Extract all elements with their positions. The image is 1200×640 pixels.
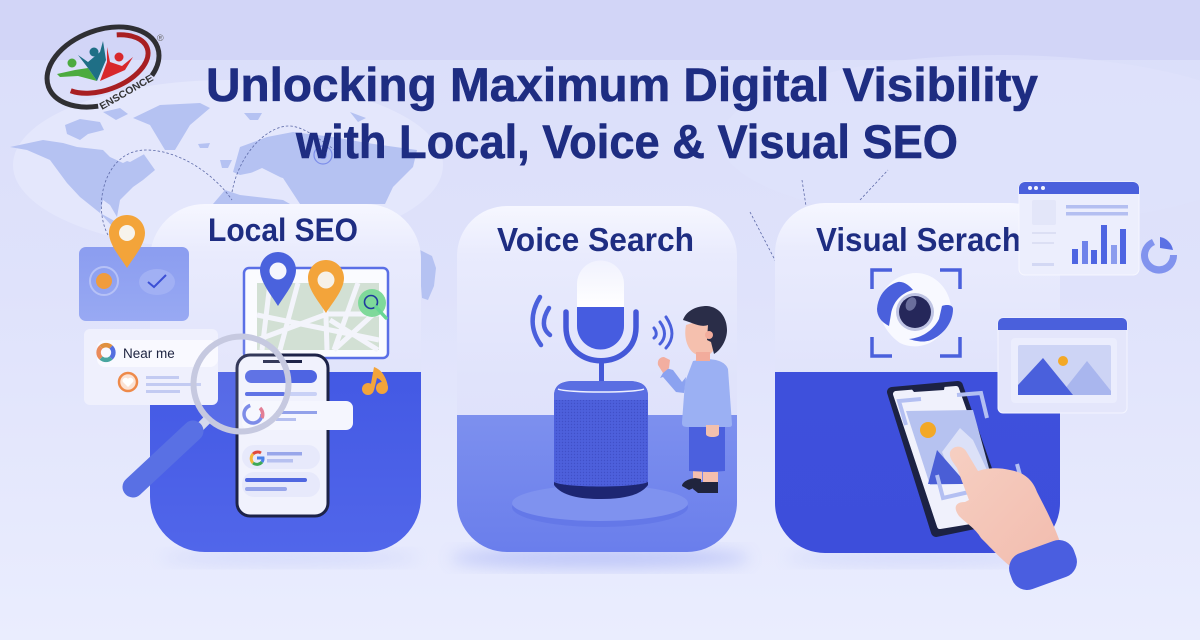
speaker platform xyxy=(512,485,688,527)
title: Unlocking Maximum Digital Visibility xyxy=(206,58,1038,111)
title xyxy=(206,58,1038,168)
title: with Local, Voice & Visual SEO xyxy=(295,115,958,168)
hand cuff xyxy=(1005,536,1081,594)
icon: camera lens eye xyxy=(877,273,953,346)
bar chart xyxy=(1072,225,1126,264)
icon: music note xyxy=(362,367,388,395)
icon: orange map pin xyxy=(308,260,344,313)
heading: Voice Search: Voice Search xyxy=(497,221,694,258)
scan corners xyxy=(899,393,1020,498)
icon: magnifying glass xyxy=(133,336,288,487)
icon: microphone xyxy=(566,260,636,383)
icon: heart badge xyxy=(119,373,137,391)
icon: scan brackets xyxy=(872,270,960,356)
heading: Visual Serach: Visual Serach xyxy=(816,221,1021,258)
smart speaker xyxy=(554,381,648,499)
card: image window xyxy=(998,318,1127,413)
card: Near me: Near me xyxy=(123,346,175,361)
icon: donut chart xyxy=(1141,237,1177,274)
phone with hand xyxy=(892,384,1081,594)
logo: Ensconce xyxy=(36,12,170,122)
panel: Visual Search xyxy=(775,203,1081,594)
icon: blue map pin xyxy=(260,252,296,306)
icon: Google G xyxy=(251,452,263,464)
person xyxy=(658,306,732,493)
logo: Ensconce: ® xyxy=(157,33,164,43)
panel: Local SEO xyxy=(150,204,421,552)
icon: sound waves right xyxy=(654,317,672,348)
panel: Voice Search xyxy=(457,206,737,552)
phone xyxy=(237,355,353,516)
card: dashboard chart xyxy=(1019,182,1139,275)
logo: Ensconce: ENSCONCE xyxy=(98,73,156,113)
icon: colourful ring xyxy=(99,345,113,360)
hand xyxy=(950,447,1060,566)
icon: sound waves left xyxy=(533,297,550,345)
map card xyxy=(244,268,388,358)
heading: Local SEO: Local SEO xyxy=(208,212,358,248)
card: location tile xyxy=(79,215,189,321)
card: Near me xyxy=(84,329,218,405)
icon: orange pin on tile xyxy=(109,215,145,268)
world map xyxy=(10,80,888,300)
